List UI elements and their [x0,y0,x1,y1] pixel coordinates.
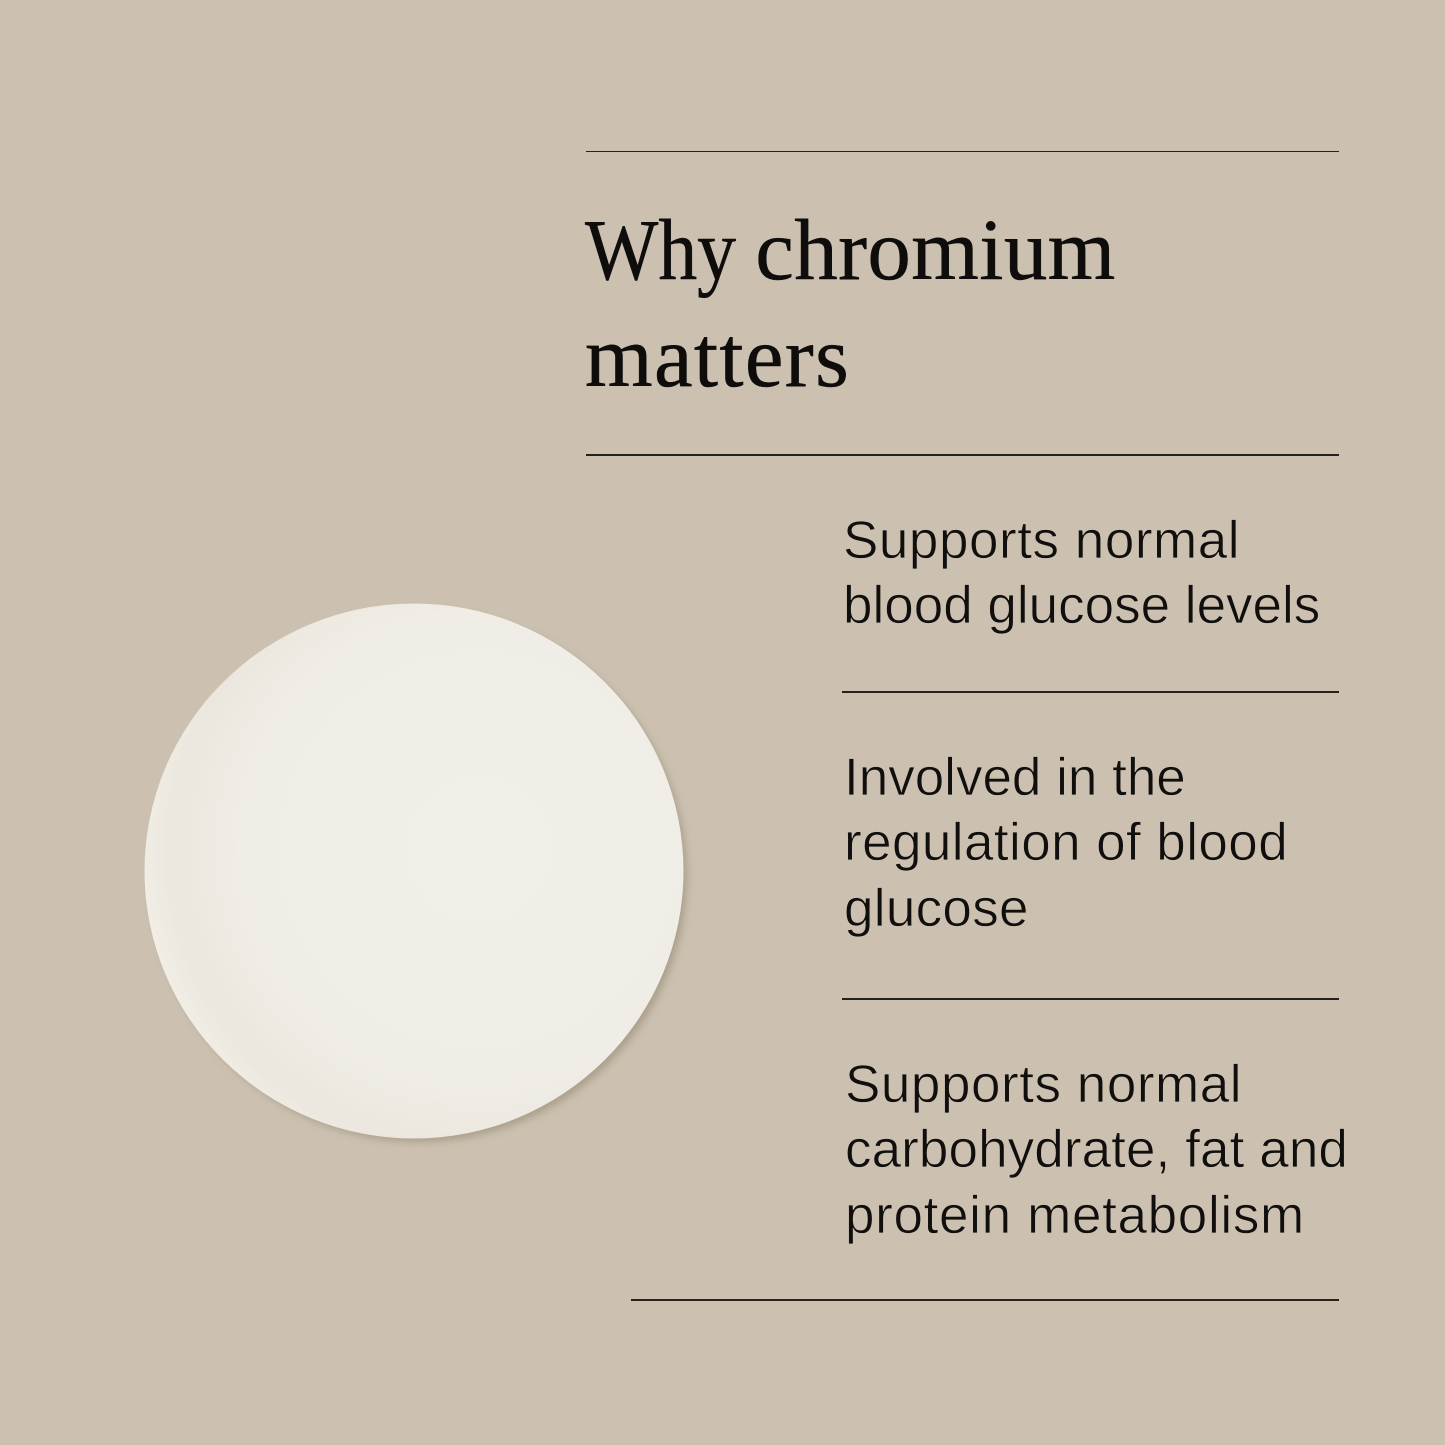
text block: blood glucose levels [843,510,1320,635]
text block: metabolism: Supports normal [845,1055,1242,1114]
title: chromium [755,200,1116,298]
title: matters [585,308,850,405]
text block: regulation of blood glucose: Involved in the [844,748,1186,807]
title: Why [585,200,736,298]
text block: blood glucose levels: blood glucose levels [843,576,1320,635]
text block: metabolism: carbohydrate, fat and [845,1120,1348,1179]
text block: regulation of blood glucose: glucose [844,879,1029,938]
text block: metabolism: protein metabolism [845,1186,1305,1245]
text block: blood glucose levels: Supports normal [843,510,1240,570]
text block: regulation of blood glucose: regulation of blood [844,813,1288,872]
text block: regulation of blood glucose [844,748,1288,938]
text block: metabolism [845,1055,1348,1245]
title [584,200,1116,405]
illustration: white round tablet [144,604,690,1145]
